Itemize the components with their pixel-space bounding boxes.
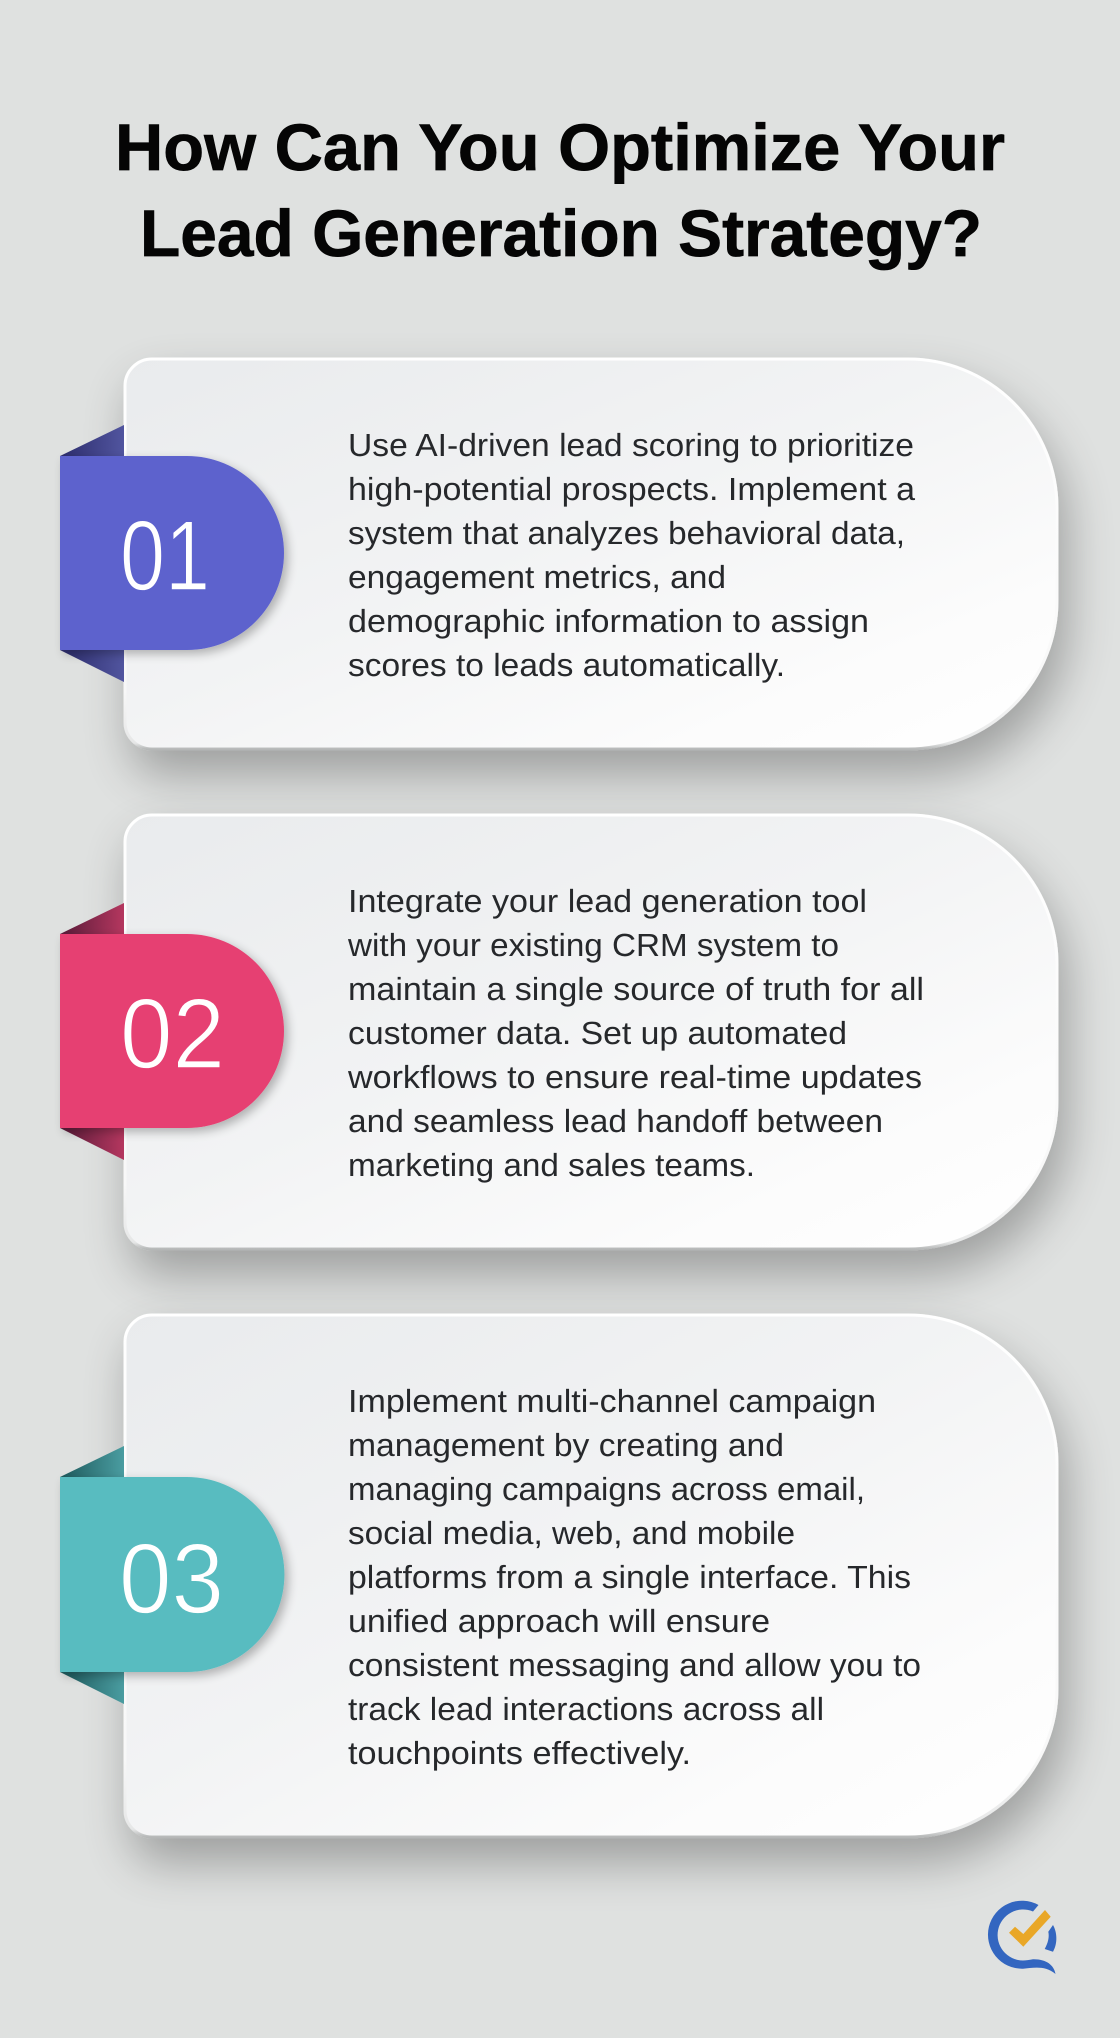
text: step 3 (348, 1383, 921, 1771)
card 3 background (125, 1315, 1057, 1837)
ribbon fold top 2 (60, 903, 124, 934)
text: step 3: track lead interactions across all (348, 1691, 824, 1727)
text: step 2: customer data. Set up automated (348, 1015, 847, 1051)
badge 01: 01 (120, 500, 210, 612)
text: step 1: scores to leads automatically. (348, 647, 785, 683)
text: step 1: demographic information to assign (348, 603, 869, 639)
ribbon fold bottom 1 (60, 650, 124, 682)
card 1 background (125, 359, 1057, 749)
card 2 background (125, 815, 1057, 1249)
text: step 3: unified approach will ensure (348, 1603, 770, 1639)
text: step 2: workflows to ensure real-time updates (347, 1059, 922, 1095)
ribbon fold bottom 3 (60, 1672, 124, 1704)
text: step 2: marketing and sales teams. (348, 1147, 755, 1183)
ribbon fold bottom 2 (60, 1128, 124, 1160)
text: step 1 (348, 427, 915, 683)
badge 03: 03 (119, 1523, 224, 1635)
text: step 3: management by creating and (348, 1427, 784, 1463)
ribbon fold top 1 (60, 425, 124, 456)
title: Lead Generation Strategy? (140, 196, 982, 270)
text: step 3: social media, web, and mobile (348, 1515, 795, 1551)
text: step 3: managing campaigns across email, (348, 1471, 865, 1507)
text: step 3: Implement multi-channel campaign (348, 1383, 876, 1419)
text: step 3: consistent messaging and allow you to (348, 1647, 921, 1683)
title (115, 110, 1005, 270)
text: step 1: Use AI-driven lead scoring to prioritize (348, 427, 914, 463)
ribbon fold top 3 (60, 1446, 124, 1477)
text: step 2: and seamless lead handoff between (348, 1103, 883, 1139)
text: step 2 (347, 883, 924, 1183)
text: step 2: maintain a single source of truth for all (348, 971, 924, 1007)
badge 03 (60, 1477, 284, 1672)
text: step 3: platforms from a single interface. This (348, 1559, 911, 1595)
panel: step 3 (60, 1315, 1057, 1837)
title: How Can You Optimize Your (115, 110, 1005, 184)
badge 02 (60, 934, 284, 1128)
badge 02: 02 (120, 978, 225, 1090)
text: step 3: touchpoints effectively. (348, 1735, 691, 1771)
text: step 2: Integrate your lead generation tool (348, 883, 867, 919)
text: step 2: with your existing CRM system to (347, 927, 839, 963)
panel: step 2 (60, 815, 1057, 1249)
text: step 1: system that analyzes behavioral data, (348, 515, 905, 551)
text: step 1: high-potential prospects. Implement a (348, 471, 915, 507)
text: step 1: engagement metrics, and (348, 559, 726, 595)
badge 01 (60, 456, 284, 650)
icon: logo chat bubble with check (988, 1901, 1056, 1974)
panel: step 1 (60, 359, 1057, 749)
